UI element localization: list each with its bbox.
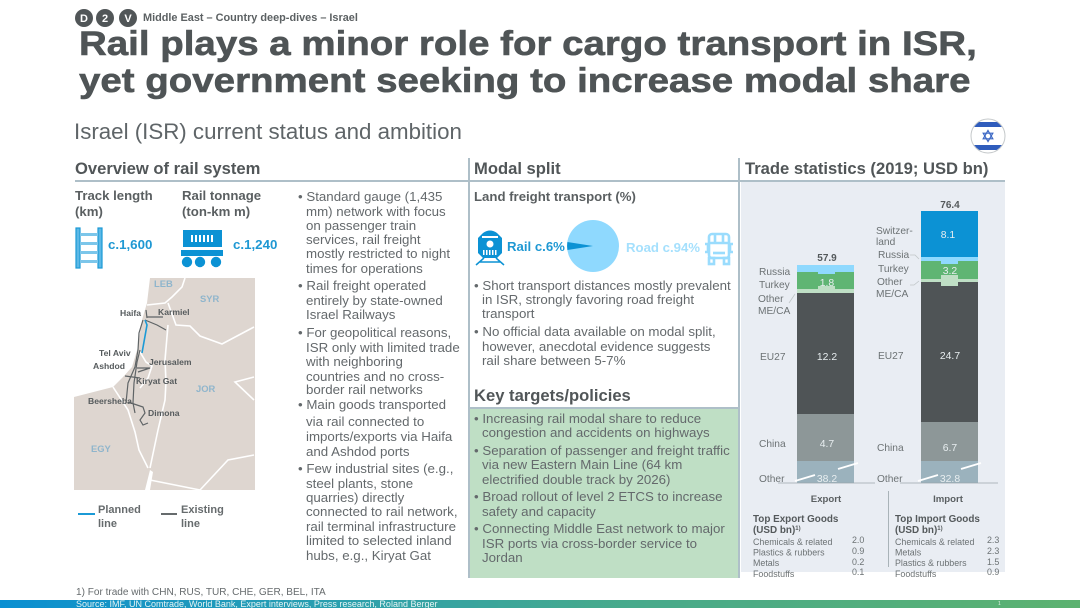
- table: top import goods: 2.3: [987, 546, 999, 556]
- table: top import goods: (USD bn): [895, 525, 937, 536]
- export bar: Other: [759, 474, 785, 485]
- import bar: [876, 200, 998, 485]
- section tag: D2V breadcrumb: 2: [102, 13, 108, 25]
- stacked bar charts: export and import: [758, 200, 998, 485]
- panel: track length metric: (km): [75, 204, 103, 219]
- text block: rail system bullets: limited to selected inland: [306, 533, 452, 548]
- map of Israel rail network: Karmiel: [158, 307, 190, 317]
- map of Israel rail network: LEB: [154, 278, 173, 289]
- map of Israel rail network: Ashdod: [93, 361, 125, 371]
- import bar: EU27: [878, 351, 904, 362]
- map of Israel rail network: Tel Aviv: [99, 348, 131, 358]
- heading: trade statistics: Trade statistics (2019; USD bn): [745, 159, 988, 178]
- text block: rail system bullets: and Ashdod ports: [306, 444, 410, 459]
- table: top import goods: 2.3: [987, 535, 999, 545]
- table: top export goods: Metals: [753, 558, 780, 568]
- text block: key targets bullets: • Broad rollout of level 2 ETCS to increase: [474, 489, 723, 504]
- text block: rail system bullets: • Few industrial sites (e.g.,: [298, 461, 453, 476]
- map of Israel rail network: EGY: [91, 443, 112, 454]
- icon: Israel flag: [970, 118, 1006, 154]
- text block: rail system bullets: via rail connected to: [306, 414, 424, 429]
- table: top export goods: 0.2: [852, 557, 864, 567]
- title: [78, 25, 977, 100]
- table: top export goods: Export: [811, 494, 842, 505]
- panel: rail tonnage metric: Rail tonnage: [182, 188, 261, 203]
- import bar: 24.7: [940, 351, 960, 362]
- table: top export goods: Plastics & rubbers: [753, 548, 825, 558]
- table: top export goods: 2.0: [852, 535, 864, 545]
- heading: overview of rail system: Overview of rail system: [75, 159, 260, 178]
- title: Rail plays a minor role for cargo transport in ISR,: [79, 25, 977, 63]
- import bar: land: [876, 237, 896, 248]
- import bar: China: [877, 443, 904, 454]
- export bar: Russia: [759, 267, 790, 278]
- text block: rail system bullets: Israel Railways: [306, 307, 395, 322]
- export bar: 57.9: [817, 253, 837, 264]
- map of Israel rail network: [74, 278, 255, 490]
- subheading: land freight transport: Land freight transport (%): [474, 189, 636, 204]
- text block: rail system bullets: with neighboring: [306, 354, 403, 369]
- text block: key targets bullets: congestion and accidents on highways: [482, 425, 710, 440]
- export bar: ME/CA: [758, 306, 790, 317]
- divider line between export and import: [888, 491, 889, 567]
- text block: key targets bullets: electrified double track by 2026): [482, 472, 670, 487]
- export bar: 12.2: [817, 352, 837, 363]
- table: top export goods: [753, 494, 864, 579]
- text block: rail system bullets: mm) network with focus: [306, 204, 446, 219]
- table: top import goods: 0.9: [987, 567, 999, 577]
- text block: rail system bullets: on passenger train: [306, 218, 416, 233]
- import bar: Other: [877, 474, 903, 485]
- text block: rail system bullets: imports/exports via Haifa: [306, 429, 452, 444]
- import bar: 8.1: [941, 230, 955, 241]
- text block: modal split bullets: transport: [482, 306, 534, 321]
- text block: rail system bullets: • Standard gauge (1,435: [298, 189, 442, 204]
- icon: truck: [705, 232, 733, 266]
- section tag: D2V breadcrumb: D: [80, 13, 88, 25]
- text block: modal split bullets: in ISR, strongly favoring road freight: [482, 292, 694, 307]
- import bar: 32.8: [940, 474, 960, 485]
- import bar: Russia: [878, 250, 909, 261]
- map of Israel rail network: Kiryat Gat: [136, 376, 177, 386]
- label: rail share: Rail c.6%: [507, 239, 565, 254]
- icon: locomotive: [476, 230, 504, 266]
- section tag: D2V breadcrumb: [75, 9, 358, 27]
- panel: rail tonnage metric: [181, 188, 277, 268]
- footnote: 1) For trade with CHN, RUS, TUR, CHE, GER, BEL, ITA: [76, 587, 326, 598]
- title: yet government seeking to increase modal share: [79, 62, 971, 100]
- panel: rail tonnage metric: (ton-km m): [182, 204, 250, 219]
- import bar: Switzer-: [876, 226, 913, 237]
- export bar: 38.2: [817, 474, 837, 485]
- pie: [567, 220, 619, 272]
- text block: rail system bullets: countries and no cross-: [306, 369, 444, 384]
- label: road share: Road c.94%: [626, 240, 700, 255]
- text block: rail system bullets: steel plants, stone: [306, 476, 413, 491]
- text block: key targets bullets: safety and capacity: [482, 504, 596, 519]
- table: top import goods: 1.5: [987, 557, 999, 567]
- export bar: 1.8: [820, 278, 834, 289]
- text block: rail system bullets: • Main goods transported: [298, 397, 446, 412]
- export bar: Other: [758, 294, 784, 305]
- map legend: line: [181, 518, 200, 530]
- map of Israel rail network: Haifa: [120, 308, 141, 318]
- pie chart: rail vs road: [476, 220, 733, 272]
- table: top import goods: 1): [937, 526, 943, 532]
- table: top export goods: Chemicals & related: [753, 537, 832, 547]
- table: top import goods: Foodstuffs: [895, 569, 937, 579]
- table: top import goods: Chemicals & related: [895, 537, 974, 547]
- icon: freight wagon: [181, 230, 223, 268]
- table: top export goods: 1): [795, 526, 801, 532]
- panel: track length metric: [75, 188, 153, 269]
- table: top export goods: 0.9: [852, 546, 864, 556]
- text block: rail system bullets: mostly restricted to night: [306, 246, 450, 261]
- panel: key targets background: [468, 408, 740, 578]
- text block: rail system bullets: hubs, e.g., Kiryat Gat: [306, 548, 431, 563]
- text block: modal split bullets: • Short transport distances mostly prevalent: [474, 278, 731, 293]
- panel: track length metric: c.1,600: [108, 237, 152, 252]
- table: top import goods: Top Import Goods: [895, 514, 980, 525]
- import bar: 3.2: [943, 266, 957, 277]
- text block: modal split bullets: [474, 278, 731, 368]
- heading: modal split: Modal split: [474, 159, 561, 178]
- text block: key targets bullets: ISR ports via cross-border service to: [482, 536, 697, 551]
- section tag: D2V breadcrumb: V: [124, 13, 132, 25]
- import bar: 6.7: [943, 443, 957, 454]
- subtitle: Israel (ISR) current status and ambition: [74, 119, 462, 144]
- text block: key targets bullets: • Increasing rail modal share to reduce: [474, 411, 701, 426]
- map legend: [78, 504, 224, 530]
- map of Israel rail network: JOR: [196, 383, 216, 394]
- text block: rail system bullets: [298, 189, 460, 563]
- table: top export goods: Top Export Goods: [753, 514, 839, 525]
- heading: key targets: Key targets/policies: [474, 386, 631, 405]
- text block: rail system bullets: ISR only with limited trade: [306, 340, 460, 355]
- map legend: line: [98, 518, 117, 530]
- text block: modal split bullets: • No official data available on modal split,: [474, 324, 716, 339]
- panel: rail tonnage metric: c.1,240: [233, 237, 277, 252]
- map of Israel rail network: Dimona: [148, 408, 180, 418]
- text block: rail system bullets: • For geopolitical reasons,: [298, 325, 451, 340]
- icon: rail track: [75, 227, 103, 269]
- table: top export goods: (USD bn): [753, 525, 795, 536]
- text block: rail system bullets: • Rail freight operated: [298, 278, 426, 293]
- text block: key targets bullets: [474, 411, 730, 565]
- export bar: Turkey: [759, 280, 791, 291]
- table: top import goods: Metals: [895, 548, 922, 558]
- panel: trade background: [741, 180, 1005, 572]
- table: top import goods: [895, 494, 999, 579]
- text block: key targets bullets: via new Eastern Main Line (64 km: [482, 457, 682, 472]
- text block: rail system bullets: quarries) directly: [306, 490, 404, 505]
- section tag: D2V breadcrumb: Middle East – Country deep-dives – Israel: [143, 12, 358, 24]
- footer bar with source: 1: [998, 601, 1001, 607]
- text block: rail system bullets: rail terminal infrastructure: [306, 519, 456, 534]
- text block: modal split bullets: rail share between 5-7%: [482, 353, 625, 368]
- panel: track length metric: Track length: [75, 188, 153, 203]
- export bar: 4.7: [820, 439, 834, 450]
- export bar: China: [759, 439, 786, 450]
- text block: rail system bullets: connected to rail network,: [306, 504, 458, 519]
- table: top import goods: Plastics & rubbers: [895, 558, 967, 568]
- text block: key targets bullets: • Separation of passenger and freight traffic: [474, 443, 730, 458]
- table: top import goods: Import: [933, 494, 964, 505]
- map of Israel rail network: Beersheba: [88, 396, 132, 406]
- import bar: 76.4: [940, 200, 960, 211]
- text block: rail system bullets: entirely by state-owned: [306, 293, 443, 308]
- table: top export goods: 0.1: [852, 567, 864, 577]
- map of Israel rail network: SYR: [200, 293, 220, 304]
- import bar: Turkey: [878, 264, 910, 275]
- footer bar with source: [0, 600, 1080, 608]
- map legend: Existing: [181, 504, 224, 516]
- import bar: ME/CA: [876, 289, 908, 300]
- text block: key targets bullets: Jordan: [482, 550, 523, 565]
- export bar: EU27: [760, 352, 786, 363]
- map legend: Planned: [98, 504, 141, 516]
- import bar: Other: [877, 277, 903, 288]
- table: top export goods: Foodstuffs: [753, 569, 795, 579]
- text block: rail system bullets: border rail networks: [306, 382, 423, 397]
- text block: modal split bullets: however, anecdotal evidence suggests: [482, 339, 710, 354]
- text block: key targets bullets: • Connecting Middle East network to major: [474, 521, 725, 536]
- map of Israel rail network: Jerusalem: [149, 357, 192, 367]
- export bar: [758, 253, 875, 485]
- text block: rail system bullets: times for operations: [306, 261, 423, 276]
- text block: rail system bullets: services, rail freight: [306, 232, 421, 247]
